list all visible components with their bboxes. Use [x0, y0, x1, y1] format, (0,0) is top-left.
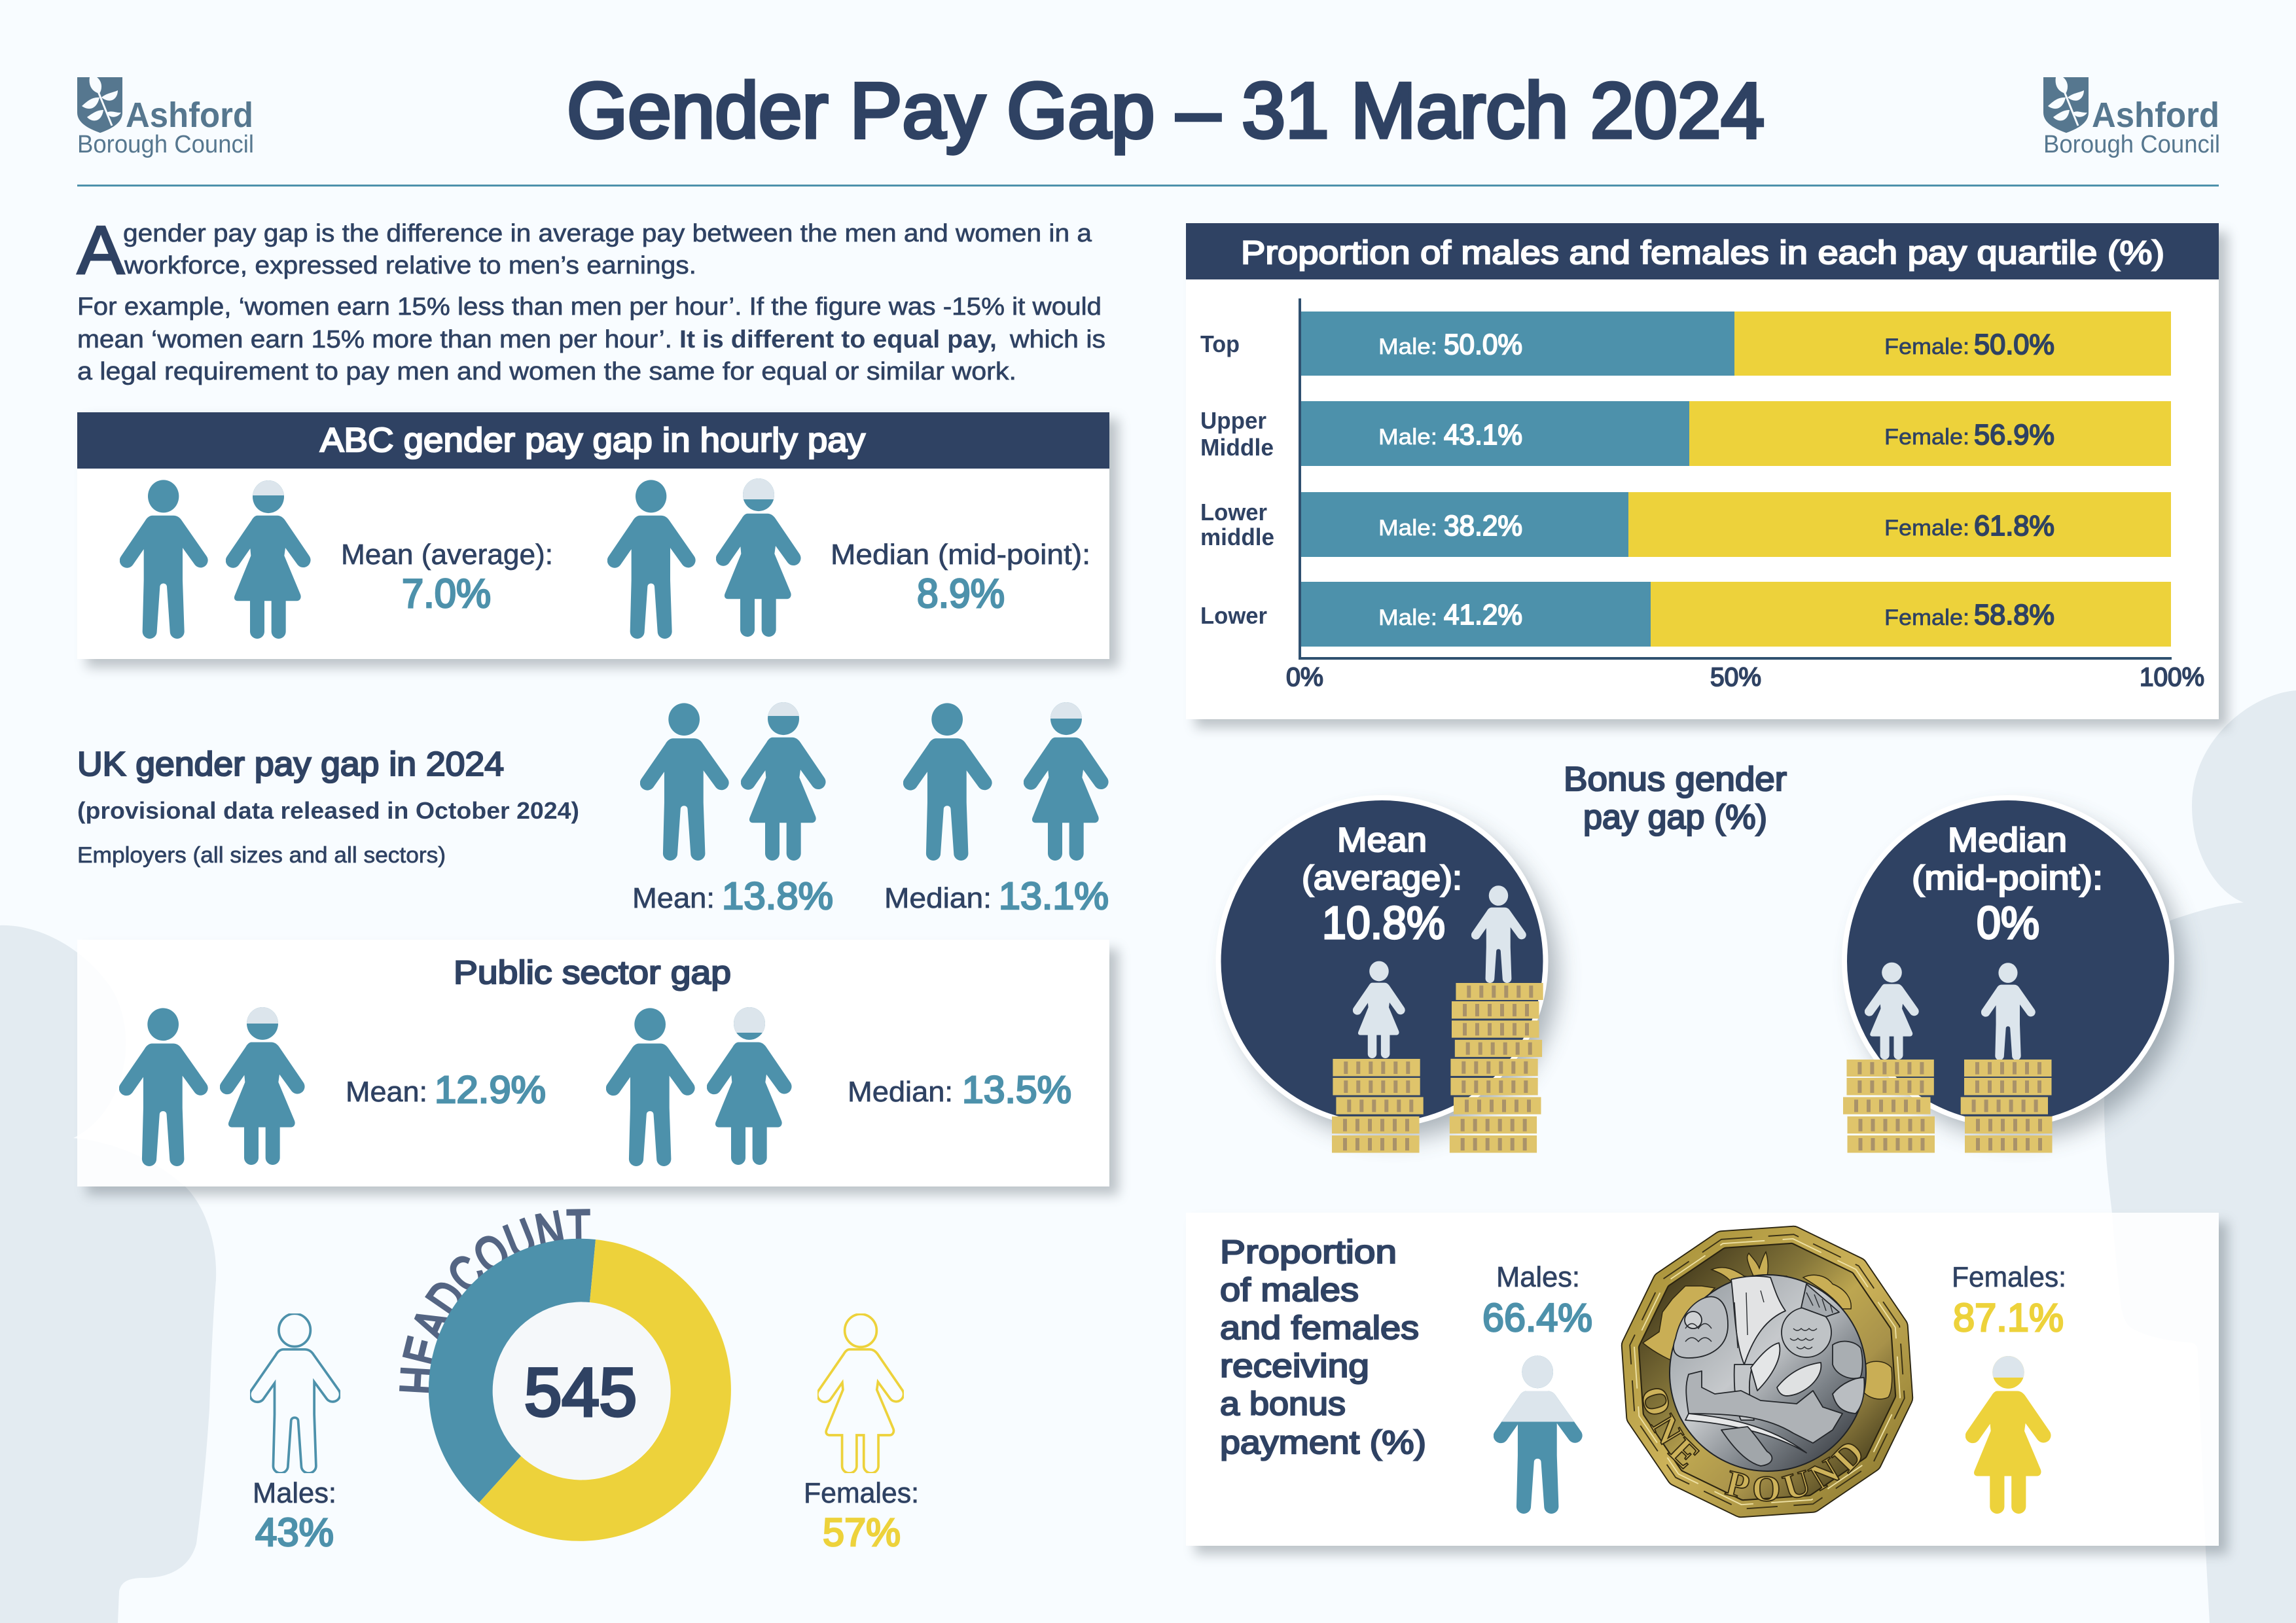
- stat: mean: [346, 1069, 546, 1111]
- panel: public sector gap: [119, 954, 1071, 1166]
- panel: bonus recipients: [1220, 1225, 2066, 1518]
- heading bar: [1186, 223, 2219, 279]
- stat: mean: 12.9%: [435, 1069, 546, 1111]
- icon: one pound coin: [1621, 1225, 1914, 1518]
- row: lower: Female:: [1884, 605, 1969, 630]
- stat: median: 8.9%: [917, 571, 1005, 616]
- title: Gender Pay Gap – 31 March 2024: [567, 67, 1765, 154]
- stat: males: [253, 1477, 336, 1554]
- row: top: Male:: [1378, 334, 1437, 359]
- stat: males: [1482, 1261, 1592, 1340]
- curved label: HEADCOUNT: [399, 1209, 590, 1393]
- stat: mean: 7.0%: [402, 571, 491, 616]
- stat text: Median: [1948, 821, 2067, 859]
- stat: females: Females:: [1952, 1261, 2066, 1293]
- stat: males: 66.4%: [1482, 1296, 1592, 1340]
- stat: males: Males:: [253, 1477, 336, 1509]
- icon: man on coins: [1471, 885, 1526, 983]
- row: lower: Male:: [1378, 605, 1437, 630]
- coin stack: male: [1450, 983, 1543, 1153]
- heading bar: ABC gender pay gap in hourly pay: [320, 421, 865, 459]
- icon: man mean: [640, 703, 729, 861]
- heading text: [77, 745, 579, 868]
- logo: right: Ashford: [2092, 96, 2219, 135]
- donut chart: 545: [524, 1355, 637, 1431]
- icon: man median: [606, 1008, 695, 1166]
- coin lettering: ONE POUND: [1643, 1388, 1861, 1502]
- heading text: UK gender pay gap in 2024: [77, 745, 504, 783]
- icon: woman partial fill: [1965, 1356, 2051, 1514]
- bonus median: [1843, 798, 2183, 1153]
- row: upper middle: [1200, 401, 2171, 466]
- logo: left: Ashford: [126, 96, 253, 135]
- icon: woman median: [1024, 702, 1109, 861]
- stat: median: Median:: [884, 882, 992, 914]
- icon: woman median: [707, 1007, 792, 1165]
- stat: mean: Mean:: [632, 882, 715, 914]
- intro text: It is different to equal pay,: [679, 326, 997, 353]
- icon: woman median: [716, 478, 801, 637]
- stat: median: Median:: [848, 1076, 953, 1108]
- intro text: workforce, expressed relative to men’s earnings.: [124, 252, 696, 279]
- row: lower middle: Male:: [1378, 516, 1437, 541]
- stat text: (mid-point):: [1912, 859, 2103, 897]
- stat: median: 13.5%: [962, 1069, 1071, 1111]
- heading text: [1220, 1234, 1426, 1461]
- bonus mean: [1219, 798, 1558, 1153]
- row: lower: [1200, 582, 2171, 647]
- coin stack: female: [1843, 1060, 1935, 1153]
- icon: man partial fill: [1494, 1355, 1583, 1514]
- row: lower middle: [1200, 492, 2171, 557]
- row: upper middle: Upper: [1200, 407, 1266, 434]
- heading: Public sector gap: [454, 954, 731, 991]
- circle: [1219, 798, 1558, 1139]
- stat: median: Median (mid-point):: [831, 539, 1090, 571]
- stat: mean: [341, 539, 553, 616]
- row: upper middle: Female:: [1884, 425, 1969, 450]
- background silhouette: right: [2104, 690, 2296, 1623]
- heading bar: Proportion of males and females in each pay quartile (%): [1241, 234, 2164, 271]
- intro text: a legal requirement to pay men and women the same for equal or similar work.: [77, 358, 1016, 385]
- stat: mean: 13.8%: [722, 875, 833, 918]
- axes: [1286, 298, 2204, 692]
- axes: 0%: [1286, 663, 1323, 692]
- row: lower: 41.2%: [1444, 599, 1522, 631]
- heading bar: [77, 412, 1109, 469]
- heading text: Proportion: [1220, 1234, 1397, 1270]
- intro text: A: [77, 213, 125, 289]
- intro text: mean ‘women earn 15% more than men per hour’.: [77, 326, 672, 353]
- icon: man on coins: [1981, 963, 2036, 1060]
- intro text: gender pay gap is the difference in average pay between the men and women in a: [123, 220, 1092, 247]
- stat text: Mean: [1337, 821, 1427, 859]
- row: upper middle: 43.1%: [1444, 419, 1522, 451]
- heading text: payment (%): [1220, 1424, 1426, 1461]
- coin stack: female: [1332, 1059, 1424, 1153]
- circle: [1844, 798, 2183, 1139]
- stat: females: 57%: [823, 1510, 901, 1554]
- stat text: 0%: [1977, 897, 2039, 948]
- intro text: which is: [1009, 326, 1105, 353]
- icon: woman mean: [226, 480, 311, 639]
- row: top: 50.0%: [1974, 329, 2054, 361]
- gold emblems: [1643, 1252, 1892, 1399]
- icon: female outline: [817, 1314, 904, 1473]
- stat: median: [884, 875, 1109, 918]
- axes: 50%: [1710, 663, 1761, 692]
- row: top: Top: [1200, 330, 1240, 357]
- stat: median: 13.1%: [999, 875, 1109, 918]
- stat text: [1302, 821, 1462, 948]
- heading text: (provisional data released in October 2024): [77, 797, 579, 824]
- row: lower: Lower: [1200, 602, 1267, 629]
- donut chart: [429, 1239, 731, 1541]
- logo: right: [2043, 77, 2220, 158]
- stat: mean: [632, 875, 833, 918]
- icon: woman on coins: [1353, 961, 1405, 1058]
- row: lower: 58.8%: [1974, 599, 2054, 631]
- icon: woman mean: [220, 1007, 305, 1165]
- intro text: [77, 213, 1105, 385]
- logo: left: [77, 77, 254, 158]
- panel backgrounds: [77, 279, 2219, 1546]
- icon: man median: [607, 480, 696, 639]
- panel shadows: [86, 232, 2228, 1554]
- silver emblems: [1674, 1276, 1864, 1466]
- axes: 100%: [2140, 663, 2204, 692]
- row: top: 50.0%: [1444, 329, 1522, 361]
- heading text: and females: [1220, 1310, 1419, 1346]
- stat: females: [804, 1477, 919, 1554]
- heading text: of males: [1220, 1272, 1359, 1308]
- intro text: For example, ‘women earn 15% less than men per hour’. If the figure was -15% it would: [77, 293, 1102, 321]
- bonus heading: [1564, 760, 1787, 836]
- panel: ABC gender pay gap: [77, 412, 1109, 639]
- row: upper middle: Middle: [1200, 434, 1274, 461]
- logo: left: Borough Council: [77, 131, 254, 158]
- row: upper middle: 56.9%: [1974, 419, 2054, 451]
- stat: females: 87.1%: [1953, 1296, 2064, 1340]
- stat text: 10.8%: [1322, 897, 1445, 948]
- stat: males: Males:: [1496, 1261, 1580, 1293]
- background silhouette: left: [0, 925, 216, 1623]
- stat text: [1912, 821, 2103, 948]
- row: lower middle: middle: [1200, 524, 1274, 550]
- logo: right: Borough Council: [2043, 131, 2220, 158]
- stat: median: [848, 1069, 1071, 1111]
- icon: woman mean: [741, 702, 826, 861]
- row: top: Female:: [1884, 334, 1969, 359]
- stat: females: Females:: [804, 1477, 919, 1509]
- row: lower middle: 61.8%: [1974, 510, 2054, 542]
- coin stack: male: [1961, 1060, 2053, 1153]
- icon: man median: [903, 703, 992, 861]
- row: lower middle: 38.2%: [1444, 510, 1522, 542]
- row: upper middle: Male:: [1378, 425, 1437, 450]
- stat: mean: Mean:: [346, 1076, 427, 1108]
- icon: man mean: [119, 1008, 208, 1166]
- heading text: a bonus: [1220, 1385, 1346, 1422]
- icon: woman on coins: [1865, 963, 1919, 1060]
- bonus heading: Bonus gender: [1564, 760, 1787, 798]
- row: top: [1200, 312, 2171, 376]
- row: lower middle: Lower: [1200, 499, 1267, 526]
- icon: male outline: [250, 1313, 340, 1473]
- stat text: (average):: [1302, 859, 1462, 897]
- stat: median: [831, 539, 1090, 616]
- stat: mean: Mean (average):: [341, 539, 553, 571]
- stat: females: [1952, 1261, 2066, 1340]
- row: lower middle: Female:: [1884, 516, 1969, 541]
- heading text: receiving: [1220, 1347, 1369, 1384]
- panel: UK gender pay gap: [77, 702, 1109, 918]
- bonus heading: pay gap (%): [1583, 798, 1767, 836]
- stat: males: 43%: [255, 1510, 334, 1554]
- heading text: Employers (all sizes and all sectors): [77, 843, 446, 868]
- icon: man mean: [120, 480, 208, 639]
- panel: pay quartile chart: [1186, 223, 2219, 692]
- panel: headcount: [250, 1209, 919, 1554]
